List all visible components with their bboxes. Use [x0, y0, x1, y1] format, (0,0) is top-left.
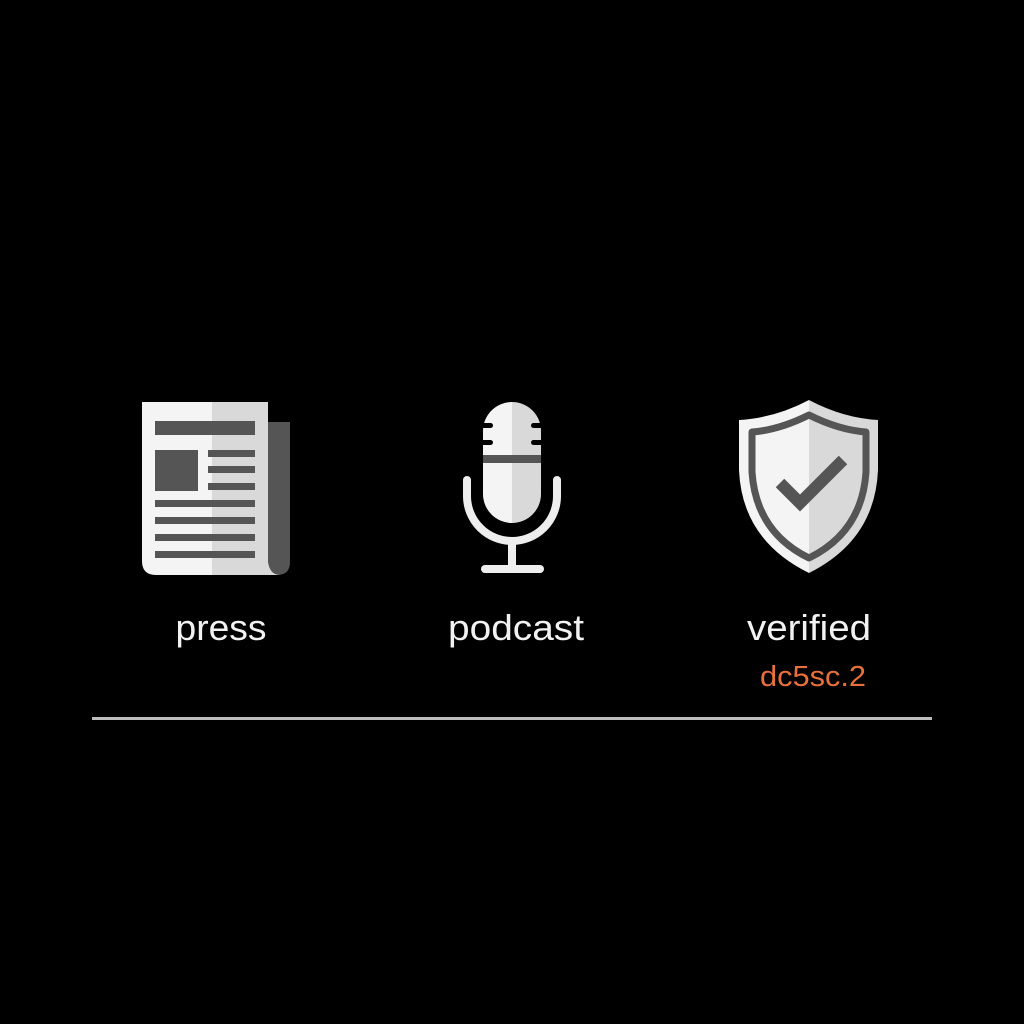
label: press: press [176, 607, 266, 648]
label: verified: verified [747, 607, 871, 648]
divider line [92, 717, 932, 720]
icon: shield with check [739, 400, 878, 573]
label: podcast: podcast [448, 607, 584, 648]
icon: microphone [467, 402, 557, 573]
label: code: dc5sc.2 [760, 661, 866, 693]
icon: newspaper [142, 402, 290, 575]
